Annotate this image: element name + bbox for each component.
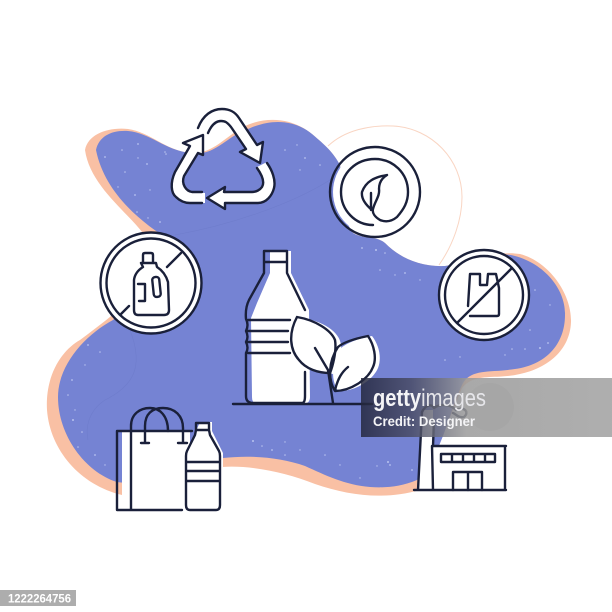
inner ring — [106, 238, 196, 328]
baseline — [233, 403, 372, 405]
background blob: blue — [58, 122, 565, 487]
big leaf outline — [291, 317, 335, 403]
icon: factory — [414, 405, 506, 490]
icon: central bottle with leaves — [233, 251, 380, 404]
outer ring — [330, 147, 420, 237]
banner background — [361, 378, 612, 437]
icon: recycling arrows — [172, 109, 275, 209]
watermark credit: Credit: Designer — [373, 414, 476, 429]
recycling arrow: top outline — [198, 109, 263, 163]
image id tag — [0, 590, 76, 606]
small bottle outline — [186, 423, 220, 510]
icon: shopping bag and small bottle — [117, 408, 223, 510]
watermark logo: gettyimages — [373, 385, 486, 412]
recycling arrow: bottom outline — [207, 163, 275, 209]
bag handles — [131, 408, 187, 443]
bottle outline — [246, 251, 305, 403]
recycling arrow: bottom — [207, 162, 275, 209]
prohibition slash — [457, 268, 512, 323]
bag white panel — [122, 431, 190, 510]
watermark swirl — [466, 383, 514, 431]
prohibition slash — [121, 253, 181, 314]
circle white fill — [333, 148, 421, 236]
bottle handle — [152, 277, 161, 297]
icon: no plastic bag — [439, 250, 529, 340]
factory door — [453, 472, 482, 490]
plastic bag — [468, 274, 499, 316]
icon: leaf circle — [330, 147, 421, 237]
smoke — [422, 405, 466, 446]
inner ring with leaf — [341, 159, 408, 225]
bottle white body — [251, 251, 310, 404]
small bottle white body — [186, 422, 223, 510]
chimney and building — [414, 412, 506, 490]
faint contour lines — [87, 180, 330, 440]
factory white fill — [418, 410, 505, 490]
thin peach circle — [328, 126, 462, 265]
blob texture specks — [67, 143, 551, 479]
background blob: peach shadow — [47, 120, 571, 496]
watermark banner — [361, 378, 612, 437]
big leaf — [294, 318, 341, 374]
circle badge — [439, 250, 529, 340]
tag background — [0, 590, 76, 606]
detergent bottle — [134, 253, 169, 315]
tag number: 1222264756 — [8, 594, 71, 606]
recycling arrow: left outline — [172, 135, 203, 203]
icon: no detergent bottle — [100, 232, 202, 334]
small leaf outline — [330, 336, 375, 391]
recycling arrow: top — [198, 109, 263, 163]
recycling arrow: left — [172, 135, 205, 203]
inner ring — [445, 256, 523, 334]
bag outline — [117, 431, 192, 510]
factory windows — [441, 454, 495, 462]
small leaf — [333, 336, 380, 391]
circle badge — [100, 232, 202, 334]
